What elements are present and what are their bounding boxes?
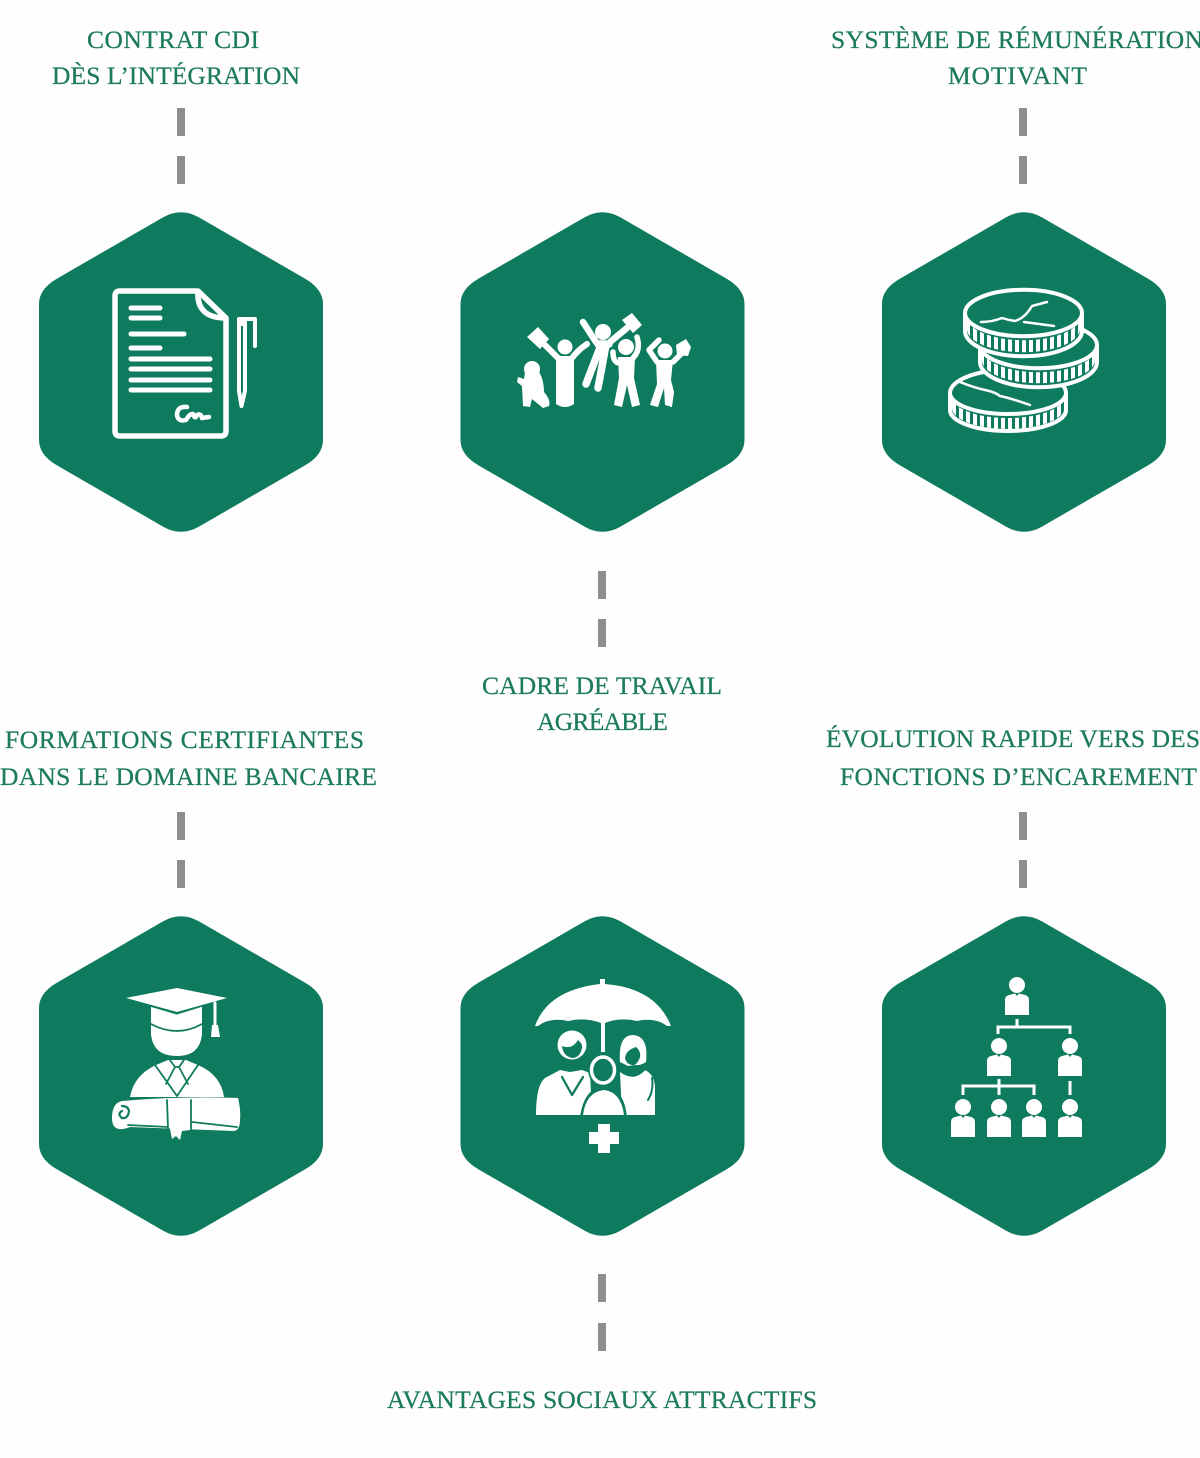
connector: rémunération (1019, 108, 1027, 184)
icon: org chart (951, 977, 1082, 1137)
label: rémunération: SYSTÈME DE RÉMUNÉRATION (831, 25, 1200, 54)
label: cadre de travail: AGRÉABLE (537, 707, 668, 736)
label: contrat CDI: DÈS L’INTÉGRATION (52, 61, 300, 90)
label: contrat CDI: CONTRAT CDI (87, 25, 259, 54)
hexagon: évolution (882, 916, 1166, 1236)
connector: avantages (598, 1274, 606, 1351)
label: avantages sociaux: AVANTAGES SOCIAUX ATTRACTIFS (387, 1385, 817, 1414)
hexagon: contrat (39, 212, 323, 532)
connector: évolution (1019, 812, 1027, 888)
label: évolution (826, 724, 1200, 791)
connector: cadre (598, 571, 606, 647)
icon: family under umbrella with cross (535, 979, 671, 1153)
label: cadre de travail (482, 671, 722, 736)
connector: contrat CDI (177, 108, 185, 184)
icon: coins (950, 290, 1097, 431)
label: évolution: FONCTIONS D’ENCAREMENT (840, 762, 1197, 791)
label: formations: FORMATIONS CERTIFIANTES (5, 725, 364, 754)
label: cadre de travail: CADRE DE TRAVAIL (482, 671, 722, 700)
label: formations (0, 725, 377, 791)
hexagon: formations (39, 916, 323, 1236)
label: formations: DANS LE DOMAINE BANCAIRE (0, 762, 377, 791)
connector: formations (177, 812, 185, 888)
hexagon: avantages (460, 916, 744, 1236)
icon: graduate with diploma (112, 988, 240, 1140)
icon: cheering people (517, 313, 691, 408)
label: rémunération: MOTIVANT (948, 61, 1087, 90)
icon: contract and pen (115, 291, 255, 436)
label: contrat CDI (52, 25, 300, 90)
hexagon: cadre (460, 212, 744, 532)
label: évolution: ÉVOLUTION RAPIDE VERS DES (826, 724, 1200, 753)
label: rémunération (831, 25, 1200, 90)
hexagon: rémunération (882, 212, 1166, 532)
